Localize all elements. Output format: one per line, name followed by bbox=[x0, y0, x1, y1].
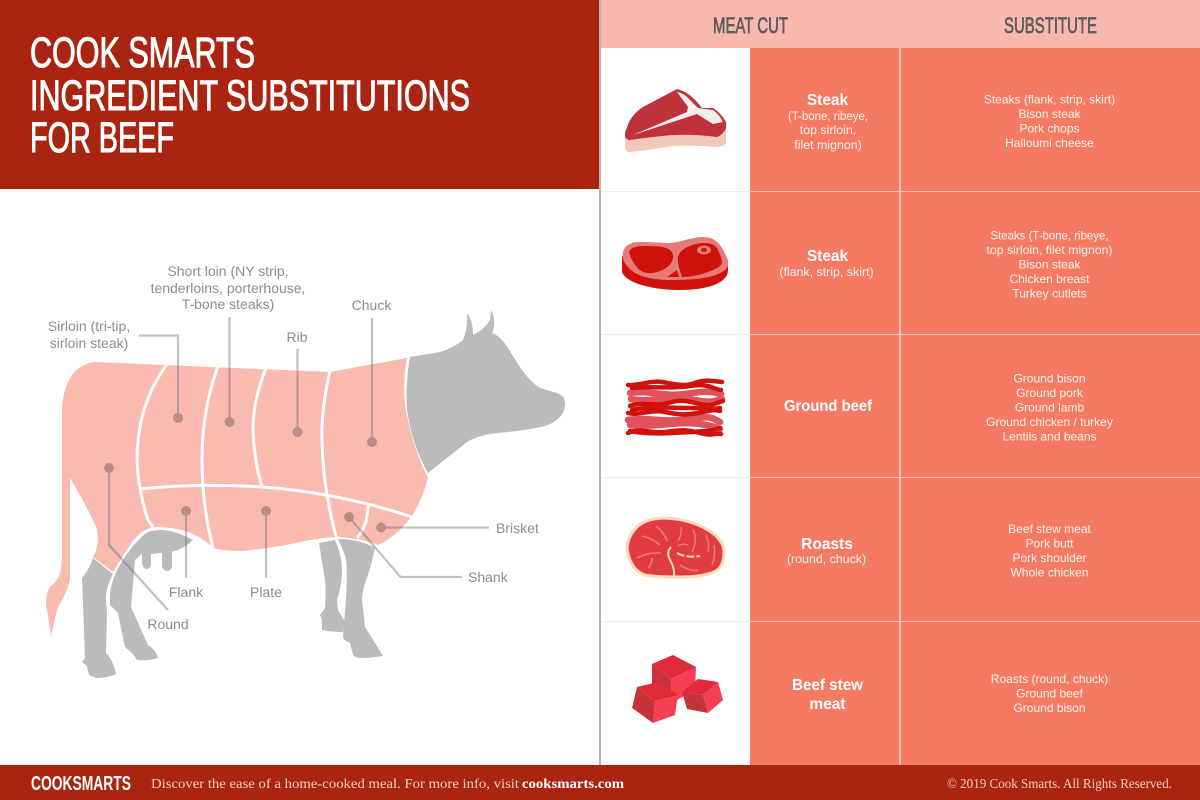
substitutes: Steaks (flank, strip, skirt) bbox=[984, 92, 1115, 106]
substitutes bbox=[986, 372, 1113, 444]
copyright: © 2019 Cook Smarts. All Rights Reserved. bbox=[947, 776, 1172, 791]
row 1: t-bone steak bbox=[625, 89, 1115, 152]
substitutes bbox=[984, 92, 1115, 150]
substitutes: Ground lamb bbox=[1015, 400, 1085, 414]
label: flank bbox=[169, 506, 204, 600]
icon: cross-cut steak bbox=[622, 237, 728, 290]
label: shank bbox=[344, 512, 509, 585]
cut name: (T-bone, ribeye, bbox=[788, 109, 868, 123]
label: rib bbox=[286, 329, 308, 437]
substitutes: top sirloin, filet mignon) bbox=[986, 243, 1112, 257]
substitutes bbox=[1008, 522, 1092, 580]
icon: roast bbox=[627, 518, 724, 577]
substitutes: Ground chicken / turkey bbox=[986, 415, 1113, 429]
table header bbox=[600, 0, 1200, 48]
row 4: roasts bbox=[627, 518, 1092, 580]
row 3: ground beef bbox=[628, 372, 1113, 444]
cut lines bbox=[137, 364, 412, 548]
substitutes: Roasts (round, chuck) bbox=[991, 672, 1108, 686]
label: chuck: Chuck bbox=[352, 297, 392, 313]
substitutes: Bison steak bbox=[1018, 258, 1082, 272]
cut name: (round, chuck) bbox=[787, 552, 866, 566]
footer bbox=[0, 765, 1200, 800]
label: brisket: Brisket bbox=[496, 520, 539, 536]
column heading: meat cut: MEAT CUT bbox=[713, 13, 788, 38]
substitutes: Halloumi cheese bbox=[1005, 136, 1094, 150]
substitutes: Ground pork bbox=[1016, 386, 1084, 400]
column heading: substitute: SUBSTITUTE bbox=[1004, 13, 1097, 38]
footer tagline: Discover the ease of a home-cooked meal. For more info, visit bbox=[151, 776, 519, 791]
cut name bbox=[788, 92, 868, 152]
cut name: Ground beef bbox=[784, 398, 873, 415]
substitutes: Pork shoulder bbox=[1012, 551, 1087, 565]
label: sirloin: Sirloin (tri-tip, bbox=[48, 318, 130, 334]
title: FOR BEEF bbox=[30, 114, 174, 162]
cut name: Steak bbox=[807, 248, 849, 265]
row 5: beef stew meat bbox=[632, 655, 1108, 723]
title bbox=[30, 29, 470, 162]
substitutes: Chicken breast bbox=[1009, 272, 1090, 286]
substitutes: Lentils and beans bbox=[1002, 430, 1097, 444]
label: short loin bbox=[151, 263, 305, 427]
substitutes: Steaks (T-bone, ribeye, bbox=[990, 228, 1108, 242]
label: flank: Flank bbox=[169, 584, 204, 600]
label: short loin: T-bone steaks) bbox=[182, 296, 274, 312]
label: sirloin: sirloin steak) bbox=[50, 335, 128, 351]
label: plate: Plate bbox=[250, 584, 282, 600]
label: round bbox=[104, 463, 189, 632]
icon: t-bone steak bbox=[625, 89, 726, 152]
substitutes: Pork butt bbox=[1025, 536, 1074, 550]
cut name: filet mignon) bbox=[794, 138, 862, 152]
cut name: Roasts bbox=[801, 536, 853, 553]
icon: beef cubes bbox=[632, 655, 723, 723]
cut name bbox=[779, 248, 874, 279]
cow body bbox=[46, 358, 428, 637]
footer logo: COOKSMARTS bbox=[31, 773, 131, 795]
substitutes bbox=[986, 228, 1112, 300]
cut name: meat bbox=[809, 696, 846, 713]
substitutes: Pork chops bbox=[1019, 122, 1080, 136]
label: short loin: Short loin (NY strip, bbox=[167, 263, 289, 279]
substitutes: Ground bison bbox=[1013, 701, 1086, 715]
substitutes bbox=[991, 672, 1108, 715]
title: INGREDIENT SUBSTITUTIONS bbox=[30, 72, 470, 120]
footer tagline: cooksmarts.com bbox=[522, 776, 625, 791]
label: rib: Rib bbox=[286, 329, 308, 345]
cow head bbox=[406, 310, 565, 473]
label: plate bbox=[250, 506, 282, 600]
label: brisket bbox=[376, 520, 539, 536]
label: chuck bbox=[352, 297, 392, 447]
cut name bbox=[787, 536, 866, 566]
cow legs bbox=[82, 530, 383, 678]
label: round: Round bbox=[147, 616, 189, 632]
cut name: top sirloin, bbox=[800, 123, 856, 137]
cut name: Steak bbox=[807, 92, 849, 109]
label: sirloin bbox=[48, 318, 183, 423]
icon: ground beef strands bbox=[628, 381, 723, 435]
row 2: flank steak bbox=[622, 228, 1112, 300]
substitutes: Turkey cutlets bbox=[1012, 286, 1087, 300]
cow diagram bbox=[46, 263, 565, 678]
substitutes: Whole chicken bbox=[1010, 566, 1089, 580]
substitutes: Ground bison bbox=[1013, 372, 1086, 386]
substitutes: Bison steak bbox=[1018, 107, 1082, 121]
label: shank: Shank bbox=[468, 569, 509, 585]
label: short loin: tenderloins, porterhouse, bbox=[151, 280, 305, 296]
title banner bbox=[0, 0, 600, 189]
title: COOK SMARTS bbox=[30, 29, 255, 77]
cut name: Beef stew bbox=[792, 677, 864, 694]
cut name bbox=[792, 677, 864, 713]
cut name: (flank, strip, skirt) bbox=[779, 265, 874, 279]
substitutes: Ground beef bbox=[1016, 686, 1084, 700]
substitutes: Beef stew meat bbox=[1008, 522, 1092, 536]
table background bbox=[599, 0, 1200, 765]
